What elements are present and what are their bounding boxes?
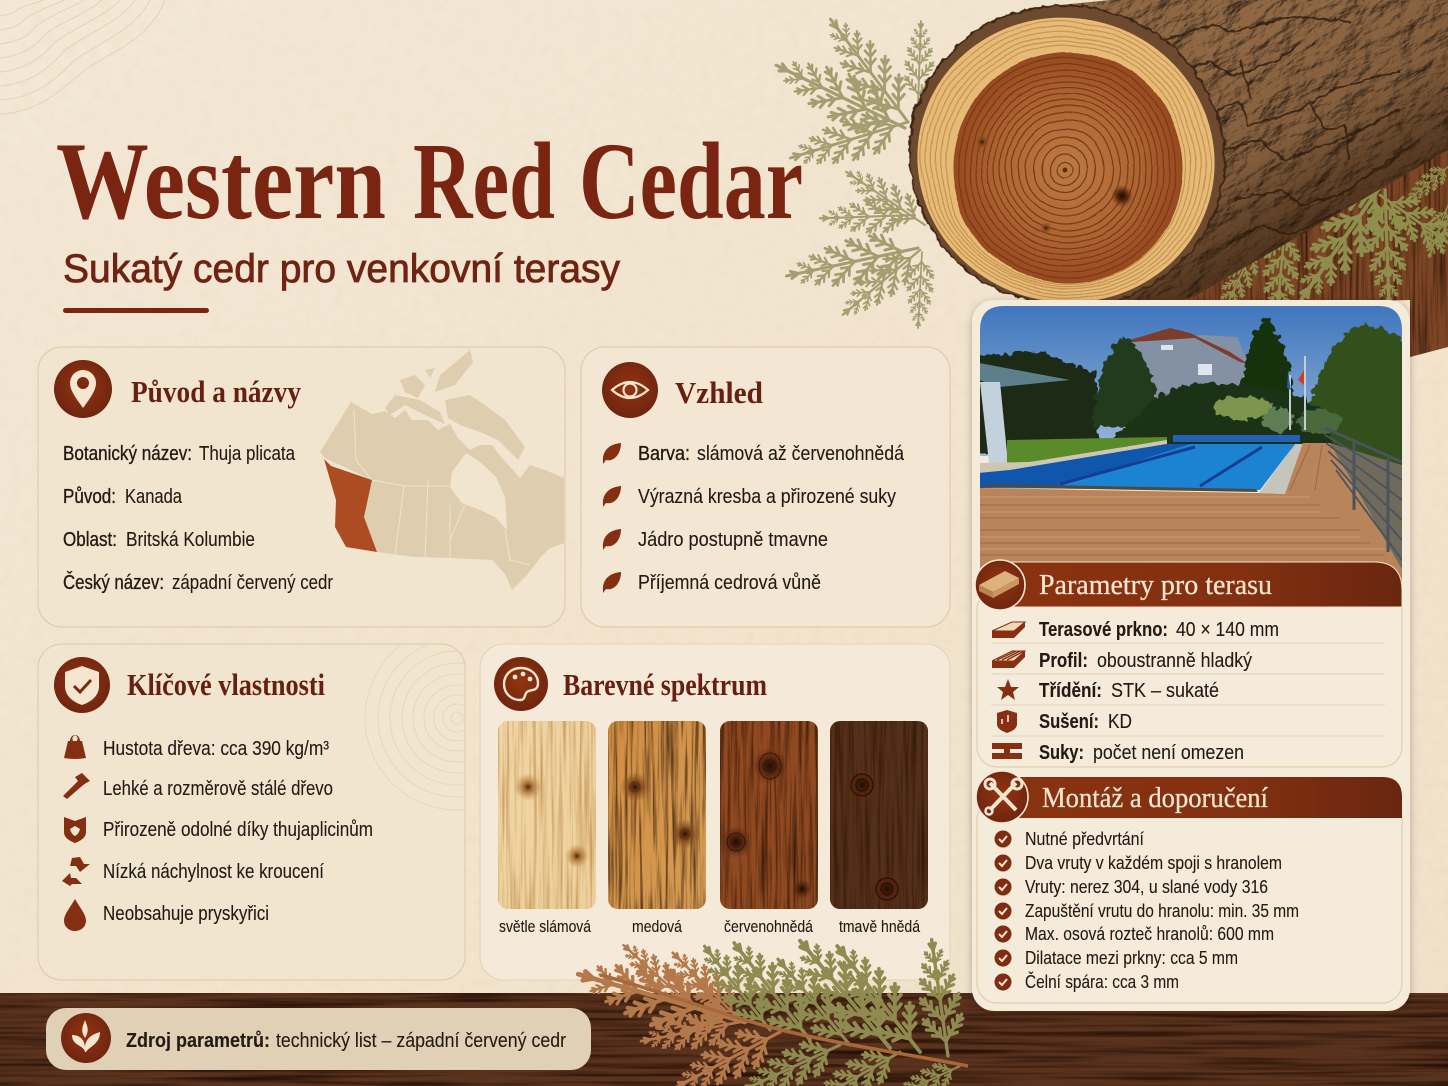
- house: [1133, 335, 1246, 399]
- dividers: [991, 643, 1385, 736]
- title: Red: [413, 120, 555, 242]
- icon: decking boards: [975, 560, 1025, 610]
- origin facts: Oblast:: [63, 529, 117, 551]
- heading: Klíčové vlastnosti: [127, 667, 325, 702]
- row: knots: počet není omezen: [1093, 742, 1244, 764]
- appearance list: [638, 443, 905, 594]
- origin facts: Původ:: [63, 486, 116, 508]
- right card: [970, 300, 1412, 1011]
- row: decking board: Terasové prkno:: [1039, 619, 1168, 641]
- property icons: [62, 735, 90, 931]
- bark cracks: [1150, 16, 1420, 245]
- swatch labels: světle slámová: [499, 917, 591, 936]
- icon: twist arrows: [62, 857, 90, 886]
- row: grading: Třídění:: [1039, 680, 1102, 702]
- installation list: Dva vruty v každém spoji s hranolem: [1025, 853, 1282, 873]
- sapwood: [887, 0, 1245, 334]
- banner: [1002, 777, 1402, 818]
- panel: Klíčové vlastnosti: [38, 644, 466, 980]
- icon: drop: [64, 899, 86, 931]
- installation list: Max. osová rozteč hranolů: 600 mm: [1025, 924, 1274, 944]
- row: knots: [992, 742, 1244, 764]
- origin facts: Botanický název:: [63, 443, 192, 465]
- Hudson Bay: [450, 453, 507, 530]
- icon: sprout: [61, 1013, 111, 1063]
- installation list: Nutné předvrtání: [1025, 829, 1144, 849]
- log: [908, 0, 1448, 300]
- swatch: light straw: [498, 721, 596, 909]
- pool water: [979, 444, 1295, 490]
- panel: Parametry pro terasu: [975, 560, 1402, 767]
- swatch: honey: [608, 721, 706, 909]
- ground left: [979, 440, 1167, 473]
- heading: Barevné spektrum: [563, 667, 767, 702]
- row: decking board: 40 × 140 mm: [1176, 619, 1279, 641]
- subtitle: Sukatý cedr pro venkovní terasy: [63, 247, 620, 291]
- cut face bark rim: [877, 0, 1257, 340]
- row: profile: [992, 650, 1252, 672]
- properties list: Nízká náchylnost ke kroucení: [103, 861, 324, 883]
- row: profile: Profil:: [1039, 650, 1088, 672]
- heading: Montáž a doporučení: [1042, 782, 1268, 814]
- icon: eye: [602, 362, 658, 418]
- map of Canada: [320, 350, 564, 590]
- knots in face: [975, 135, 1133, 234]
- icon: map pin: [54, 360, 112, 418]
- source pill: [46, 1008, 591, 1070]
- appearance list: Výrazná kresba a přirozené suky: [638, 486, 896, 508]
- swatch labels: tmavě hnědá: [839, 917, 920, 936]
- cedar sprigs beside log: [764, 4, 938, 330]
- properties list: Hustota dřeva: cca 390 kg/m³: [103, 738, 329, 760]
- row: grading: STK – sukaté: [1111, 680, 1219, 702]
- icon: shield check: [54, 657, 110, 713]
- origin facts: Kanada: [125, 486, 183, 508]
- title: [56, 120, 803, 242]
- properties list: Neobsahuje pryskyřici: [103, 903, 269, 925]
- title: Cedar: [579, 120, 803, 242]
- row: drying: [997, 710, 1132, 733]
- area behind railing: [1330, 443, 1402, 570]
- leaf bullets: [603, 443, 621, 593]
- heading: Parametry pro terasu: [1039, 569, 1272, 601]
- title: Western: [56, 120, 386, 242]
- railing: [1325, 428, 1402, 560]
- deck: [979, 443, 1402, 590]
- origin facts: [63, 443, 333, 594]
- installation list: Dilatace mezi prkny: cca 5 mm: [1025, 948, 1238, 968]
- banner: [1000, 562, 1402, 607]
- pavilion: [979, 363, 1070, 387]
- panel: Vzhled: [581, 347, 950, 627]
- heartwood: [953, 52, 1183, 284]
- properties list: Přirozeně odolné díky thujaplicinům: [103, 819, 373, 841]
- swatch: red-brown: [720, 721, 818, 909]
- source text: Zdroj parametrů:: [126, 1030, 270, 1052]
- installation list: Čelní spára: cca 3 mm: [1025, 971, 1179, 992]
- concrete edge: [1259, 444, 1303, 494]
- pool cover: [1173, 435, 1300, 442]
- properties list: [103, 738, 373, 925]
- flagpoles: [1290, 356, 1305, 430]
- panel: Barevné spektrum: [480, 644, 950, 980]
- appearance list: Jádro postupně tmavne: [638, 529, 828, 551]
- icon: hammer: [63, 773, 90, 799]
- icon: shield: [64, 817, 86, 843]
- appearance list: Příjemná cedrová vůně: [638, 572, 821, 594]
- installation list: Zapuštění vrutu do hranolu: min. 35 mm: [1025, 901, 1299, 921]
- trees: [970, 317, 1412, 470]
- row: grading: [997, 679, 1219, 702]
- swatch labels: medová: [632, 917, 682, 936]
- row: profile: oboustranně hladký: [1097, 650, 1252, 672]
- origin facts: Thuja plicata: [199, 443, 296, 465]
- row: drying: KD: [1108, 711, 1132, 733]
- origin facts: Český název:: [63, 571, 164, 594]
- log bark: [1030, 0, 1448, 300]
- lawn: [1007, 437, 1167, 463]
- properties list: Lehké a rozměrově stálé dřevo: [103, 778, 333, 800]
- source text: technický list – západní červený cedr: [276, 1030, 566, 1052]
- title rule: [63, 308, 209, 313]
- row: drying: Sušení:: [1039, 711, 1099, 733]
- row: knots: Suky:: [1039, 742, 1084, 764]
- origin facts: Britská Kolumbie: [126, 529, 255, 551]
- cedar branch bottom: [569, 923, 971, 1086]
- British Columbia highlight: [324, 459, 377, 552]
- panel: Montáž a doporučení: [976, 771, 1402, 1003]
- sapwood rings: [892, 0, 1240, 329]
- icon: tools: [976, 771, 1028, 823]
- installation list: [1025, 829, 1299, 992]
- terrace photo: [970, 306, 1412, 590]
- swatch labels: [499, 917, 920, 936]
- decorative contour lines top left: [0, 0, 165, 114]
- source text: [126, 1030, 566, 1052]
- appearance list: slámová až červenohnědá: [697, 443, 905, 465]
- bottom wood band: [0, 993, 1448, 1086]
- check bullets: [994, 830, 1012, 990]
- heading: Původ a názvy: [131, 374, 301, 409]
- cedar fronds on table: [1208, 156, 1448, 327]
- icon: weight: [64, 735, 86, 759]
- panel: Původ a názvy: [38, 347, 565, 627]
- swatch: dark brown: [830, 721, 928, 909]
- wooden table top right: [1170, 145, 1448, 357]
- heartwood rings: [958, 57, 1176, 279]
- appearance list: Barva:: [638, 443, 690, 465]
- installation list: Vruty: nerez 304, u slané vody 316: [1025, 877, 1268, 897]
- heading: Vzhled: [675, 375, 763, 410]
- icon: palette: [494, 657, 548, 711]
- swatch labels: červenohnědá: [724, 917, 813, 936]
- origin facts: západní červený cedr: [172, 572, 333, 594]
- row: decking board: [992, 619, 1279, 641]
